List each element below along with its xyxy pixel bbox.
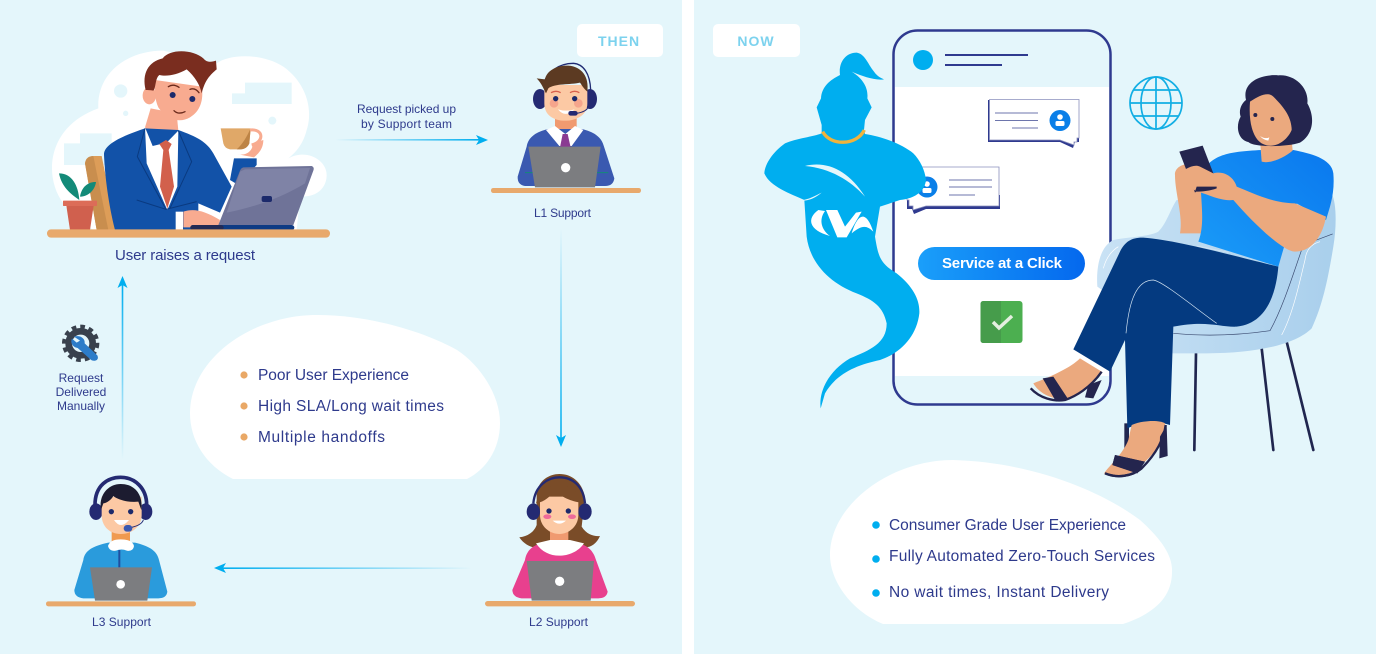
arrow: L2 to L3 — [214, 563, 472, 573]
arrow: L3 to user — [118, 276, 128, 460]
label: L2 support: L2 Support — [529, 615, 589, 629]
label: request delivered manually: Request — [59, 371, 104, 385]
callout: then problems: High SLA/Long wait times — [258, 398, 444, 415]
arrow: L1 to L2 — [556, 228, 566, 447]
icon: globe — [1130, 77, 1182, 129]
illustration: genie — [764, 53, 926, 408]
label: request delivered manually — [56, 371, 106, 413]
illustration: user at laptop — [47, 51, 330, 238]
label: request picked up — [357, 102, 456, 131]
callout: now benefits — [830, 460, 1172, 624]
button: service at a click: Service at a Click — [942, 255, 1063, 272]
illustration: front shoe overlap — [1105, 455, 1145, 476]
illustration: phone — [894, 30, 1110, 404]
arrow: user to L1 — [335, 135, 488, 145]
tag: now: NOW — [737, 33, 775, 49]
label: request picked up: by Support team — [361, 117, 452, 131]
callout: now benefits: No wait times, Instant Delivery — [889, 584, 1109, 601]
tag: then: THEN — [598, 33, 640, 49]
callout: now benefits: Consumer Grade User Experience — [889, 517, 1126, 534]
label: request delivered manually: Delivered — [56, 385, 106, 399]
illustration: L2 support agent — [485, 474, 635, 606]
label: L3 support: L3 Support — [92, 615, 152, 629]
label: user raises a request: User raises a request — [115, 247, 256, 264]
callout: now benefits: Fully Automated Zero-Touch Services — [889, 548, 1155, 565]
label: L1 support: L1 Support — [534, 206, 592, 220]
illustration: L1 support agent — [491, 63, 641, 193]
label: request delivered manually: Manually — [57, 399, 105, 413]
tag: then — [577, 24, 663, 57]
chat bubble: bottom — [907, 167, 1000, 214]
button: service at a click — [918, 247, 1085, 280]
panel: then background — [0, 0, 682, 654]
illustration: woman on chair — [1031, 75, 1336, 476]
tag: now — [713, 24, 800, 57]
panel: now background — [694, 0, 1376, 654]
icon: green check — [980, 301, 1022, 343]
label: request picked up: Request picked up — [357, 102, 456, 116]
chat bubble: top — [988, 100, 1079, 148]
callout: then problems: Multiple handoffs — [258, 429, 385, 446]
illustration: L3 support agent — [46, 477, 196, 606]
icon: gear and wrench — [64, 327, 98, 361]
callout: then problems: Poor User Experience — [258, 367, 409, 384]
callout: then problems — [190, 315, 500, 479]
